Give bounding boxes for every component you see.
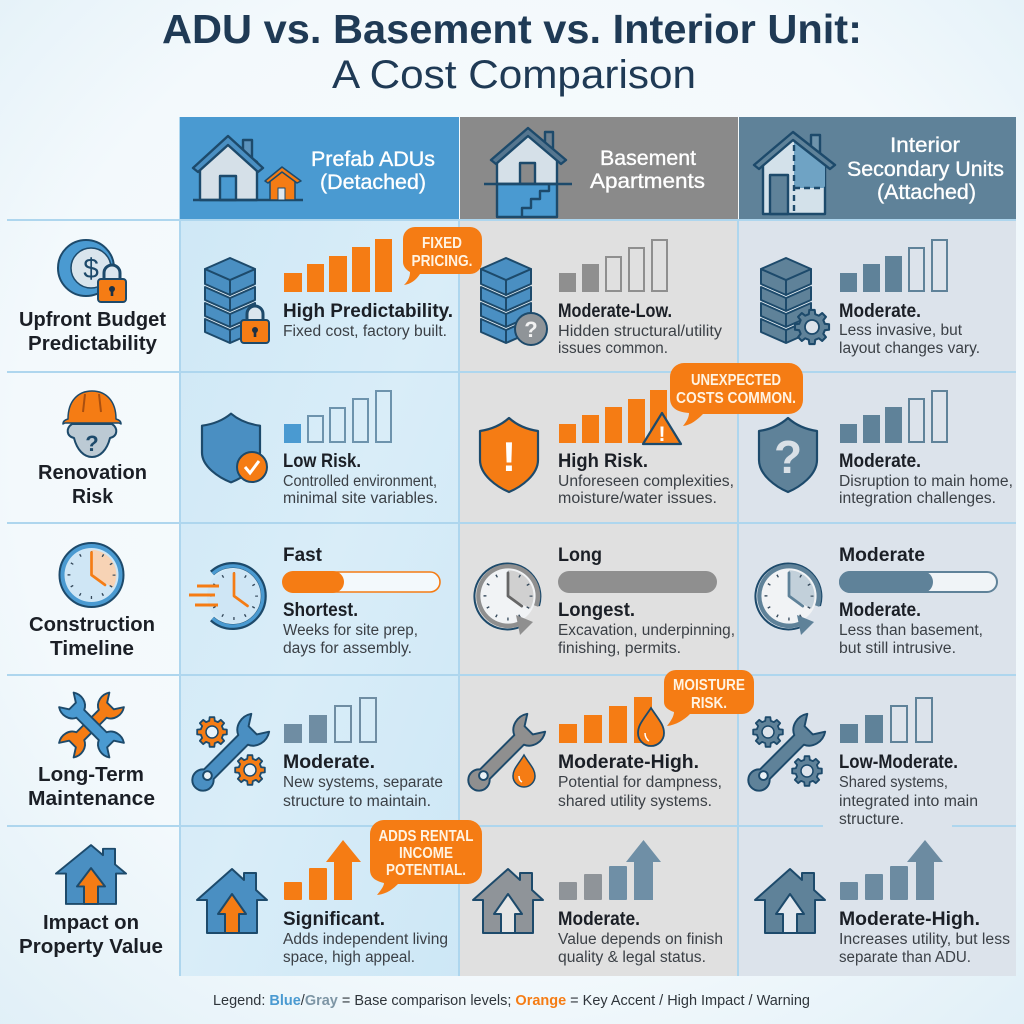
bar chart: moderate-low <box>559 240 667 292</box>
bar chart: moderate-high with drop <box>559 697 664 746</box>
cell: interior timeline <box>755 544 997 657</box>
cell: basement timeline: Excavation, underpinning, <box>558 622 735 639</box>
bar chart: high predictability <box>284 239 392 292</box>
icon: wrench and gears <box>184 712 271 799</box>
cell: prefab maintenance: structure to maintain. <box>283 793 431 810</box>
row label: upfront budget predictability: Upfront Budget <box>19 308 166 331</box>
row label: construction timeline <box>29 543 155 660</box>
cell: interior budget <box>761 240 980 357</box>
cell: basement maintenance <box>460 697 722 810</box>
cell: interior budget: Moderate. <box>839 300 921 322</box>
cell: basement budget: issues common. <box>558 340 668 357</box>
row label: upfront budget predictability <box>19 240 166 355</box>
callout: adds rental income potential: ADDS RENTAL <box>378 828 474 845</box>
cell: basement risk: High Risk. <box>558 450 648 472</box>
cell: interior risk: integration challenges. <box>839 490 996 507</box>
cell: basement value <box>473 840 723 966</box>
cell: basement timeline: Longest. <box>558 599 635 621</box>
panel: header basement apartments: Apartments <box>590 170 705 193</box>
icon: shield with question mark <box>759 418 817 492</box>
row label: long-term maintenance: Long-Term <box>38 763 144 786</box>
cell: interior value: separate than ADU. <box>839 949 971 966</box>
panel: header interior secondary units: (Attached) <box>877 181 976 204</box>
cell: prefab risk: Low Risk. <box>283 450 361 472</box>
callout: adds rental income potential: POTENTIAL. <box>386 862 466 879</box>
bar chart: low risk <box>284 391 391 443</box>
row label: long-term maintenance: Maintenance <box>28 787 155 810</box>
icon: crossed wrenches <box>57 691 126 759</box>
cell: interior risk: Moderate. <box>839 450 921 472</box>
cell: basement risk <box>480 390 734 507</box>
bar chart: moderate <box>284 698 376 743</box>
cell: basement risk: moisture/water issues. <box>558 490 717 507</box>
callout: unexpected costs common: UNEXPECTED <box>691 372 781 389</box>
panel: header prefab ADUs: (Detached) <box>320 171 426 194</box>
cell: interior timeline: but still intrusive. <box>839 640 956 657</box>
cell: interior budget: Less invasive, but <box>839 322 963 339</box>
cell: prefab maintenance <box>184 698 443 810</box>
icon: coin and lock <box>58 240 126 302</box>
row label: construction timeline: Construction <box>29 613 155 636</box>
row label: impact on property value <box>19 845 163 958</box>
cell: prefab budget <box>205 239 453 343</box>
cell: prefab value: space, high appeal. <box>283 949 415 966</box>
row label: construction timeline: Timeline <box>50 637 134 660</box>
bar chart: moderate-high with arrow <box>840 840 943 900</box>
cell: basement maintenance: Moderate-High. <box>558 751 699 773</box>
callout: moisture risk <box>664 670 754 726</box>
cell: interior timeline: Moderate <box>839 544 925 566</box>
icon: wrench and slate gears <box>740 712 827 799</box>
panel: header prefab ADUs: Prefab ADUs <box>311 148 435 171</box>
icon: stack with question mark <box>481 258 547 345</box>
cell: interior maintenance <box>740 698 978 828</box>
icon: coin and lock: $ <box>83 253 99 284</box>
progress bar: moderate <box>839 571 997 593</box>
bar chart: high risk with warning <box>559 390 681 446</box>
callout: fixed pricing: FIXED <box>422 235 462 252</box>
icon: slate house with cut-out arrow <box>755 869 825 933</box>
cell: basement maintenance: Potential for dampness, <box>558 774 722 791</box>
cell: basement timeline: finishing, permits. <box>558 640 681 657</box>
callout: adds rental income potential <box>370 820 482 895</box>
cell: prefab value <box>197 840 448 966</box>
cell: interior risk <box>759 391 1013 507</box>
cell: basement risk: Unforeseen complexities, <box>558 473 734 490</box>
cell: basement budget: Hidden structural/utility <box>558 323 722 340</box>
cell: basement budget: Moderate-Low. <box>558 300 672 322</box>
callout: fixed pricing: PRICING. <box>412 253 472 270</box>
icon: clock <box>60 543 124 607</box>
cell: prefab risk: minimal site variables. <box>283 490 438 507</box>
bar chart: low-moderate <box>840 698 932 743</box>
panel: header interior secondary units <box>739 117 1016 219</box>
cell: prefab value: Significant. <box>283 908 385 930</box>
cell: prefab risk: Controlled environment, <box>283 473 437 490</box>
panel: header basement apartments <box>460 117 738 219</box>
cell: prefab maintenance: New systems, separate <box>283 774 443 791</box>
cell: prefab maintenance: Moderate. <box>283 751 375 773</box>
cell: prefab timeline: Shortest. <box>283 599 358 621</box>
row label: impact on property value: Property Value <box>19 935 163 958</box>
progress bar: fast <box>282 571 440 593</box>
cell: basement timeline <box>474 544 735 657</box>
icon: orange shield with exclamation: ! <box>502 433 516 480</box>
cell: prefab budget: High Predictability. <box>283 300 453 322</box>
cell: prefab timeline: Weeks for site prep, <box>283 622 418 639</box>
icon: fast clock <box>189 565 264 627</box>
cell: basement value: Moderate. <box>558 908 640 930</box>
title: ADU vs. Basement vs. Interior Unit: <box>162 6 862 52</box>
panel: header interior secondary units: Secondary Units <box>847 158 1004 181</box>
panel: header interior secondary units: Interior <box>890 134 960 157</box>
bar chart: high risk with warning: ! <box>658 423 666 446</box>
callout: moisture risk: MOISTURE <box>673 677 745 694</box>
icon: stack with gear <box>761 258 829 344</box>
row label: renovation risk: Risk <box>72 485 114 508</box>
icon: worker with helmet: ? <box>85 431 99 456</box>
progress bar: long <box>558 571 717 593</box>
callout: unexpected costs common: COSTS COMMON. <box>676 390 796 407</box>
icon: gray clock with arrow <box>474 563 540 635</box>
cell: interior maintenance: integrated into main <box>839 793 978 810</box>
cell: basement value: Value depends on finish <box>558 931 723 948</box>
icon: wrench and water drop <box>460 712 547 799</box>
row label: renovation risk <box>38 391 147 508</box>
legend: Legend: Blue/Gray = Base comparison levels; Orange = Key Accent / High Impact / Warning <box>213 993 810 1009</box>
cell: interior maintenance: Low-Moderate. <box>839 751 958 773</box>
cell: basement maintenance: shared utility systems. <box>558 793 712 810</box>
cell: basement timeline: Long <box>558 544 602 566</box>
row label: upfront budget predictability: Predictability <box>28 332 158 355</box>
callout: moisture risk: RISK. <box>691 695 727 712</box>
icon: house with orange arrow <box>197 869 267 933</box>
bar chart: moderate <box>840 240 947 292</box>
title <box>162 6 862 97</box>
cell: interior value: Increases utility, but less <box>839 931 1010 948</box>
cell: interior budget: layout changes vary. <box>839 340 980 357</box>
cell: prefab timeline: Fast <box>283 544 322 566</box>
callout: adds rental income potential: INCOME <box>399 845 453 862</box>
cell: interior risk: Disruption to main home, <box>839 473 1013 490</box>
cell: basement value: quality & legal status. <box>558 949 706 966</box>
callout: fixed pricing <box>403 227 482 285</box>
cell: interior timeline: Moderate. <box>839 599 921 621</box>
cell: interior maintenance: structure. <box>839 811 904 828</box>
icon: shield with check <box>202 414 267 482</box>
title: A Cost Comparison <box>332 53 696 97</box>
row label: impact on property value: Impact on <box>43 911 139 934</box>
icon: house with arrow <box>56 845 126 904</box>
bar chart: significant with arrow <box>284 840 361 900</box>
cell: prefab timeline <box>189 544 440 657</box>
cell: prefab timeline: days for assembly. <box>283 640 412 657</box>
icon: house with detached ADU <box>193 136 303 200</box>
panel: header basement apartments: Basement <box>600 147 696 170</box>
row label: long-term maintenance <box>28 691 155 810</box>
row label: renovation risk: Renovation <box>38 461 147 484</box>
bar chart: moderate with arrow <box>559 840 661 900</box>
icon: orange shield with exclamation <box>480 418 538 492</box>
cell: prefab value: Adds independent living <box>283 931 448 948</box>
icon: stack with question mark: ? <box>524 317 538 342</box>
callout: unexpected costs common <box>670 363 803 426</box>
cell: interior value <box>755 840 1010 966</box>
cell: interior timeline: Less than basement, <box>839 622 983 639</box>
icon: gray house with cut-out arrow <box>473 869 543 933</box>
icon: house with interior unit <box>754 132 835 214</box>
icon: slate clock with arrow <box>755 563 821 635</box>
panel: header prefab ADUs <box>180 117 459 219</box>
icon: stack with lock <box>205 258 269 343</box>
cell: interior value: Moderate-High. <box>839 908 980 930</box>
cell: prefab budget: Fixed cost, factory built. <box>283 323 447 340</box>
bar chart: moderate <box>840 391 947 443</box>
cell: interior maintenance: Shared systems, <box>839 774 948 791</box>
cell: basement budget <box>481 240 722 357</box>
icon: shield with question mark: ? <box>774 431 802 483</box>
cell: prefab risk <box>202 391 438 507</box>
icon: house with basement <box>484 128 572 217</box>
